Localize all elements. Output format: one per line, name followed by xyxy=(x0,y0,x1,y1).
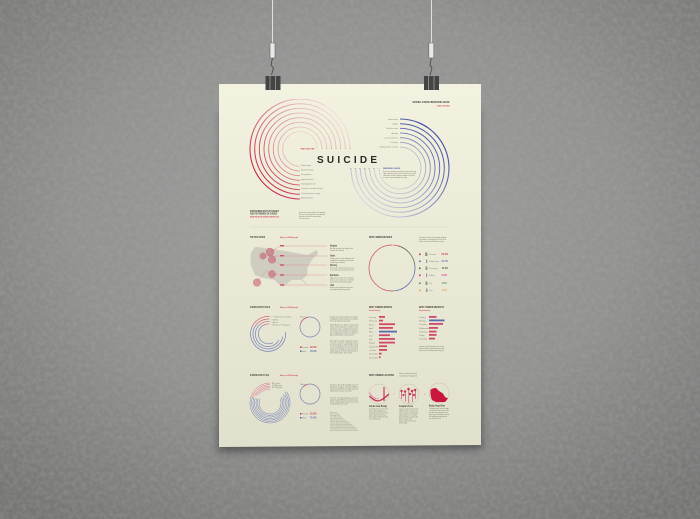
warning sign labels: Loss of interest xyxy=(384,136,398,140)
methods table xyxy=(419,252,448,292)
warning signs heading and text: as soon as you possibly can today xyxy=(383,176,407,179)
state descriptions: to counseling and mental health care xyxy=(330,268,354,272)
weekdays bar chart: Friday xyxy=(419,335,425,337)
intro text: Suicide is a serious public health problem xyxy=(299,211,325,214)
risk factor labels: Hopelessness xyxy=(301,179,314,181)
stepped text block: with those above eighty five years xyxy=(330,420,348,423)
location 3: Nanjing bridge: The large road and rail bridge xyxy=(429,407,449,410)
age donut labels: 65-74 years xyxy=(272,386,282,389)
methods table: Falling xyxy=(429,275,435,277)
warning sign labels: Anxiety xyxy=(391,132,398,135)
months bar chart: October xyxy=(369,349,376,352)
location 2: Aokigahara forest xyxy=(399,384,419,424)
months bar chart: November xyxy=(369,354,379,356)
state descriptions: especially among young people xyxy=(330,289,350,291)
weekdays bar chart: Wednesday xyxy=(419,328,430,330)
heading: top five states xyxy=(250,236,299,239)
state descriptions: Alaska xyxy=(330,254,335,258)
state descriptions: Long winters and isolation are xyxy=(330,257,354,260)
intro heading: DATA FROM THE UNITED STATES 2014 xyxy=(250,216,280,218)
months bar chart: January xyxy=(369,317,376,319)
methods table: Firearm xyxy=(429,254,436,256)
warning signs heading and text: signs, please reach out for help from a crisis xyxy=(383,172,416,175)
heading: race: SUICIDE RATE BY RACE xyxy=(250,306,270,309)
methods table: Cut xyxy=(429,282,433,285)
methods table: 1.3% xyxy=(442,290,447,292)
warning sign labels: Depression xyxy=(388,119,398,121)
race arcs labels: Asian xyxy=(272,321,278,324)
state circles xyxy=(253,248,276,286)
methods intro text: Firearms are the most common method xyxy=(419,236,446,239)
risk factor labels: Prolonged stress xyxy=(301,182,316,186)
location 1: Golden Gate Bridge: been approved for its span xyxy=(369,416,388,418)
methods intro text xyxy=(419,236,447,243)
weekdays bar chart: Thursday xyxy=(419,332,427,334)
stepped text block: having the highest rate recorded overall xyxy=(330,422,350,424)
section: suicide rate by age xyxy=(242,374,358,432)
state descriptions: Rates rising steadily over the years xyxy=(330,286,353,289)
warning sign labels xyxy=(379,119,399,149)
weekdays bar chart: Monday xyxy=(419,320,426,322)
months bar chart: February xyxy=(369,321,377,323)
age donut labels: 85+ years xyxy=(272,382,280,385)
state descriptions: options for mental health support xyxy=(330,280,352,283)
lifeline header xyxy=(412,101,450,108)
intro text: across the country xyxy=(299,217,309,220)
stepped text block: before declining steadily afterwards through old age xyxy=(330,424,354,428)
stepped text block: and control from the centers for disease control and prevention xyxy=(330,428,357,430)
age text column: people aged fifteen to twenty four xyxy=(330,398,358,402)
race arcs labels: Black or Hispanic xyxy=(272,324,290,326)
race text column: men among the deaths recorded in xyxy=(330,330,358,332)
dots between locations xyxy=(394,393,425,395)
age text column: death for all ages, with the highest xyxy=(330,386,358,388)
location 1: Golden Gate Bridge: Golden Gate Bridge xyxy=(369,405,387,408)
race text column: the time before the event xyxy=(330,352,352,354)
location 2: Aokigahara forest: place of sorrow, where signs xyxy=(399,412,418,414)
months bar chart: July xyxy=(369,339,373,341)
gender legend xyxy=(300,346,317,353)
poster sheet xyxy=(219,84,481,447)
risk factor labels: Traumatic brain injury xyxy=(301,192,320,195)
gender ring by age: Males xyxy=(300,384,305,386)
location 3: Nanjing bridge: the walkway looking out xyxy=(429,415,447,418)
race text column: professionals, friends and families in xyxy=(330,350,358,352)
location 2: Aokigahara forest: day or night of the year xyxy=(399,420,416,422)
state descriptions: across the nation xyxy=(330,249,344,252)
race text column: and Alaska Native people are higher xyxy=(330,318,358,320)
gender legend: Female xyxy=(302,347,310,349)
race text column: to use methods that are more lethal xyxy=(330,346,359,348)
stepped text block: and women peaking during their middle years xyxy=(330,423,352,426)
location 2: Aokigahara forest: Japan's sea of trees at the foot xyxy=(399,408,418,410)
section: most common months xyxy=(369,306,397,359)
race arcs chart xyxy=(251,317,286,351)
stepped text block: with increasing xyxy=(330,412,339,416)
section: suicide rate by race xyxy=(250,306,359,354)
gender legend: Male xyxy=(302,351,307,353)
months bar chart: December xyxy=(369,357,379,359)
weekdays note: and early in the working week every year xyxy=(419,349,444,352)
age text column: years, and younger groups have had xyxy=(330,400,358,404)
warning sign labels: Anger xyxy=(393,123,398,126)
race text column: reported cases, nearly seven of ten xyxy=(330,328,358,330)
state descriptions: Rural communities have less access xyxy=(330,266,354,270)
risk factor labels: Mental illness xyxy=(301,196,313,200)
age text column: elderly men across the nation xyxy=(330,390,352,392)
heading: months: Average deaths per day xyxy=(369,309,380,312)
age donut labels xyxy=(272,382,282,389)
heading: weekdays xyxy=(419,306,444,312)
weekdays bar chart: Sunday xyxy=(419,317,426,319)
months bar chart: April xyxy=(369,327,374,330)
methods table: Poisoning xyxy=(429,268,438,270)
location 3: Nanjing bridge: for those at risk xyxy=(429,417,441,420)
location 3: Nanjing bridge: two thousand people since xyxy=(429,411,448,414)
race arcs labels xyxy=(272,316,292,326)
weekdays note xyxy=(419,345,444,352)
location 1: Golden Gate Bridge: the bridge was opened in 1937 xyxy=(369,412,388,414)
state descriptions xyxy=(330,244,355,291)
main title: SUICIDE xyxy=(317,155,377,166)
location 1: Golden Gate Bridge: and a net barrier has xyxy=(369,414,386,416)
hanging clip right xyxy=(424,0,439,90)
race text column: and are less likely to seek care from xyxy=(330,348,358,350)
race text column: Suicide rates among American Indian xyxy=(330,316,358,318)
state descriptions: Big Sky country has highest rate xyxy=(330,247,353,250)
methods intro text: deaths in the United States each year xyxy=(419,240,444,243)
state descriptions: of the high numbers xyxy=(330,261,345,264)
months bar chart: June xyxy=(369,335,374,337)
intro text: families and whole communities xyxy=(299,215,321,218)
stepped text block: have studied during recent years xyxy=(330,418,346,422)
race text column: the study period. Rates are lower in xyxy=(330,332,358,334)
race text column: Men die by suicide nearly four times xyxy=(330,340,358,342)
race arcs labels: White xyxy=(272,318,280,322)
risk factors heading with dots: RISK FACTORS xyxy=(300,148,315,150)
heading: months xyxy=(369,306,392,312)
state descriptions: Wyoming xyxy=(330,264,337,267)
intro heading: DISCOVERING WHAT IS THOUGHT xyxy=(250,210,279,213)
race arcs labels: American Indian xyxy=(274,316,292,318)
race text column: make up the greatest number of all xyxy=(330,326,359,328)
gender legend: 78.0% xyxy=(310,351,317,353)
methods table: 16.6% xyxy=(442,268,448,270)
leader lines from states to labels xyxy=(257,246,327,285)
location 1: Golden Gate Bridge: in recent years xyxy=(369,418,381,420)
heading: locations: Places where the most xyxy=(399,372,417,375)
heading: locations: MOST COMMON LOCATIONS xyxy=(369,374,394,377)
lifeline header: NATIONAL SUICIDE PREVENTION LIFELINE xyxy=(412,101,450,104)
race text column: are more likely to attempt. Men tend xyxy=(330,344,358,346)
methods table: 24.7% xyxy=(442,260,448,263)
methods table: Gas xyxy=(429,290,433,292)
heading: age: SUICIDE RATE BY AGE xyxy=(250,374,269,377)
stepped text block: age among men in xyxy=(330,415,340,417)
heading: top five states: TOP FIVE STATES xyxy=(250,236,265,239)
section: most common locations xyxy=(369,372,449,424)
heading: weekdays: MOST COMMON WEEKDAYS xyxy=(419,306,444,309)
intro text: that can have lasting effects on individuals xyxy=(299,213,325,216)
risk factor labels: Depression xyxy=(301,165,311,167)
heading: age xyxy=(250,374,299,377)
location 2: Aokigahara forest: help at any time xyxy=(399,418,412,420)
stepped text block: according to the national center for injury prevention data xyxy=(330,426,357,429)
risk factor labels: Alcohol abuse xyxy=(301,168,314,172)
hanging clip left xyxy=(266,0,280,90)
methods ring chart xyxy=(363,239,421,297)
state rate tags xyxy=(280,245,284,286)
weekdays bar chart: Tuesday xyxy=(419,324,427,326)
warning sign labels: Talking about suicide xyxy=(379,146,399,149)
risk factors heading with dots xyxy=(300,148,351,150)
state descriptions: Utah xyxy=(330,284,334,287)
state descriptions: High rates across the southwest xyxy=(330,276,354,279)
weekdays note: highest in winter, peaking during the spring xyxy=(419,347,444,350)
gender legend: 22.0% xyxy=(310,347,317,349)
state descriptions: New Mexico xyxy=(330,274,339,277)
heading: top five states: Rates per 100,000 people xyxy=(280,236,299,239)
methods table: 2.4% xyxy=(442,274,447,277)
age legend: Male xyxy=(302,418,307,420)
heading: months: MOST COMMON MONTHS xyxy=(369,306,392,309)
age text column xyxy=(330,384,358,406)
state descriptions: Montana xyxy=(330,244,337,248)
stepped text block: statistics gathered across the entire united states in recent years xyxy=(330,429,358,432)
intro text xyxy=(299,211,325,220)
map of the United States xyxy=(251,247,318,287)
location 2: Aokigahara forest: urge visitors to consider xyxy=(399,414,417,416)
intro heading: AND THE FINDINGS OF SUICIDE xyxy=(250,212,277,216)
heading: race xyxy=(250,306,299,309)
location 2: Aokigahara forest: when needed xyxy=(399,422,407,424)
warning sign labels: Isolation xyxy=(391,141,398,144)
heading: locations: suicides have happened xyxy=(399,376,417,378)
months bar chart: March xyxy=(369,324,375,326)
gender ring by race: Males xyxy=(300,316,305,318)
poster shadow xyxy=(218,110,482,452)
risk factor labels: Previous suicide attempt xyxy=(301,187,323,190)
section: most common weekdays xyxy=(419,306,444,352)
location 1: Golden Gate Bridge: than 1,600 people since xyxy=(369,410,386,412)
stepped text block: every single population xyxy=(330,416,342,418)
location 2: Aokigahara forest: Aokigahara Forest xyxy=(399,405,413,408)
age legend: Female xyxy=(302,414,310,416)
stepped text block xyxy=(330,411,358,432)
stepped text block: Rates rise xyxy=(330,411,337,414)
months bar chart: September xyxy=(369,345,379,348)
state descriptions: among the commonly cited causes xyxy=(330,259,354,262)
location 3: Nanjing bridge: Nanjing Yangtze River xyxy=(429,404,445,408)
heading: age: Rates per 100,000 people xyxy=(280,374,299,377)
location 1: Golden Gate Bridge: San Francisco has seen more xyxy=(369,408,388,410)
location 2: Aokigahara forest: their families and call for xyxy=(399,416,418,418)
stepped text block: group that the researchers xyxy=(330,417,344,420)
heading: locations xyxy=(369,372,417,378)
age legend: 25.0% xyxy=(310,414,317,416)
warning sign labels: Reckless risk xyxy=(386,128,398,130)
age donut chart xyxy=(242,375,298,431)
race text column: as often as women, although women xyxy=(330,342,358,344)
race text column: White Americans follow closely and xyxy=(330,324,358,326)
methods intro text: of suicide, accounting for half of all xyxy=(419,238,447,241)
heading: methods: MOST COMMON METHODS xyxy=(369,236,392,239)
risk factor labels: Drug abuse xyxy=(301,174,312,176)
weekdays bar chart xyxy=(419,316,444,341)
location 3: Nanjing bridge: in China has seen more than xyxy=(429,409,449,412)
age text column: rates among adults in middle age and xyxy=(330,388,358,390)
weekdays bar chart: Saturday xyxy=(419,338,427,341)
age legend: 75.0% xyxy=(310,418,317,420)
heading: weekdays: Average deaths per day xyxy=(419,309,430,312)
weekdays note: Contrary to popular belief, rates are not xyxy=(419,345,444,348)
age text column: Suicide is the tenth leading cause of xyxy=(330,384,358,386)
race text column: Asian and Black communities xyxy=(330,334,354,336)
intro heading xyxy=(250,210,280,218)
heading: race: Rates per 100,000 people xyxy=(280,306,299,309)
months bar chart xyxy=(369,316,397,359)
months bar chart: May xyxy=(369,332,373,334)
race text column xyxy=(330,316,359,354)
lifeline header: 1-800-273-8255 xyxy=(436,106,450,108)
age legend xyxy=(300,413,317,420)
methods table: 1.9% xyxy=(442,283,447,285)
state descriptions: with access to firearms and few xyxy=(330,278,355,281)
warning signs heading and text xyxy=(350,167,416,179)
left spiral: risk factors xyxy=(250,99,350,199)
location 2: Aokigahara forest: of Mount Fuji is known as a xyxy=(399,410,419,412)
age text column: It is the second leading cause for xyxy=(330,396,358,400)
methods table: 50.5% xyxy=(442,254,448,256)
warning signs heading and text: WARNING SIGNS xyxy=(383,167,400,170)
age text column: consistently lower rates xyxy=(330,402,348,406)
location 3: Nanjing bridge xyxy=(429,383,449,420)
months bar chart: August xyxy=(369,342,376,345)
right spiral: warning signs xyxy=(351,119,449,217)
race text column: than any other group overall xyxy=(330,320,350,322)
location 3: Nanjing bridge: opening, and volunteers patrol xyxy=(429,413,449,416)
warning signs heading and text: If you or someone you know shows warning xyxy=(383,170,416,173)
risk factor labels xyxy=(301,165,323,200)
section: most common methods xyxy=(363,236,448,297)
warning signs heading and text: counselor, friend, family member or doctor xyxy=(383,174,415,177)
location 1: Golden Gate Bridge xyxy=(369,384,389,420)
methods table: Suffocation xyxy=(429,260,439,263)
age donut labels: 75-84 years xyxy=(272,384,282,387)
section: top five states xyxy=(250,236,355,291)
